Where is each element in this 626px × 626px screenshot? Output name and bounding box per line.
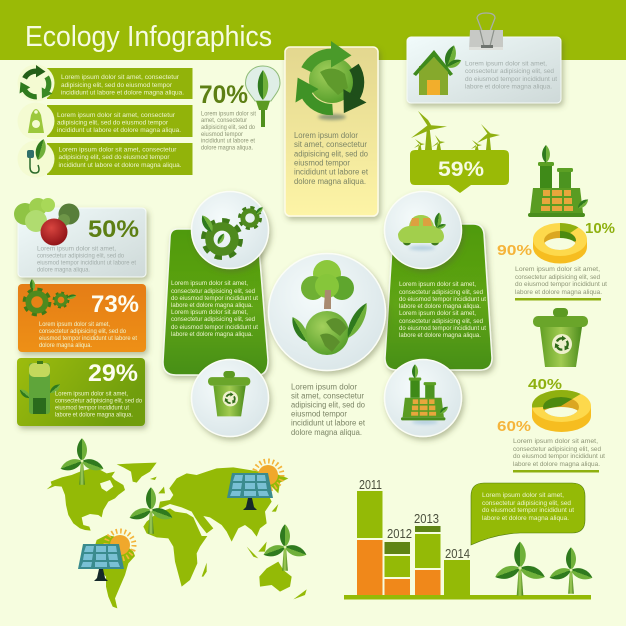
text block: donut 1: do eiusmod tempor incididunt ut: [515, 281, 607, 288]
label 40%: 40%: [528, 376, 562, 393]
text block: incididunt ut labore et: [294, 168, 369, 176]
bar 2012: 2012: [387, 526, 412, 541]
text block: consectetur adipisicing elit, sed do: [55, 398, 142, 404]
bar 2011: 2011: [359, 477, 382, 492]
header band: [0, 0, 626, 60]
text block: consectetur adipisicing elit, sed do: [37, 252, 124, 260]
stat 70%: 70%: [199, 81, 248, 109]
icon: wind turbine, Africa: [128, 487, 174, 534]
panel: three banners: [15, 64, 192, 178]
circle: gears: [192, 192, 268, 268]
text block: eiusmod tempor: [294, 158, 350, 168]
panel: orange gears 73 percent: [18, 279, 146, 352]
speech bubble: Lorem ipsum dolor sit amet,: [482, 492, 564, 499]
speech bubble: labore et dolore magna aliqua.: [482, 515, 569, 522]
banner 1: adipisicing elit, sed do eiusmod tempor: [61, 82, 173, 89]
text block: eiusmod tempor: [201, 131, 243, 138]
text block: dolore magna aliqua.: [294, 177, 366, 186]
text block: consectetur adipisicing elit, sed: [171, 288, 255, 295]
text block: eiusmod tempor incididunt ut labore et: [39, 335, 137, 342]
panel: yellow recycle card: [285, 41, 379, 216]
banner 1: Lorem ipsum dolor sit amet, consectetur: [61, 74, 180, 81]
text block: consectetur adipisicing elit, sed: [465, 68, 554, 75]
icon: solar panel with sun, South America: [78, 531, 134, 581]
speech bubble: [471, 483, 585, 545]
text block: incididunt ut labore et: [201, 138, 255, 144]
speech bubble: do eiusmod tempor incididunt ut: [482, 507, 574, 514]
stat 73%: 73%: [91, 291, 139, 318]
text block: [399, 281, 486, 339]
text block: consectetur adipisicing elit, sed: [171, 316, 255, 323]
text block: do eiusmod tempor incididunt ut: [465, 76, 557, 83]
text block: centre: incididunt ut labore et: [291, 418, 366, 428]
text block: Lorem ipsum dolor sit: [201, 110, 256, 118]
icon: battery: [18, 361, 62, 414]
text block: donut 1: labore et dolore magna aliqua.: [515, 289, 602, 296]
text block: donut 2: Lorem ipsum dolor sit amet,: [513, 438, 598, 445]
panel: 59 percent wind banner: [410, 111, 509, 193]
panel: clipped note with house: [407, 13, 561, 103]
text block: do eiusmod tempor incididunt ut: [399, 325, 486, 332]
text block: sit amet, consectetur: [294, 140, 367, 149]
banner 3: [18, 138, 192, 178]
icon: recycling globe: [285, 41, 379, 124]
circle: factory: [384, 360, 462, 436]
panel: vegetables 50 percent: [14, 198, 146, 277]
chart: donut 10/90: [498, 223, 615, 264]
text block: [39, 321, 137, 349]
title: Ecology Infographics: [25, 21, 272, 53]
text block: eiusmod tempor incididunt ut: [55, 404, 129, 412]
text block: adipisicing elit, sed do: [201, 124, 255, 131]
text block: eiusmod tempor incididunt ut labore et: [37, 260, 136, 266]
icon: globe: [305, 311, 349, 355]
text block: amet, consectetur: [201, 117, 247, 124]
stat 50%: 50%: [88, 216, 139, 243]
text block: labore et dolore magna aliqua.: [399, 332, 481, 339]
icon: solar panel with sun, Asia: [227, 461, 282, 510]
text block: dolore magna aliqua.: [37, 266, 90, 274]
circle: recycling bin: [192, 360, 268, 436]
text block: donut 2: [513, 438, 605, 472]
text block: dolore magna aliqua.: [39, 342, 92, 349]
text block: labore et dolore magna aliqua.: [171, 331, 253, 338]
icon: tree: [301, 260, 354, 309]
text block: dolore magna aliqua.: [201, 144, 253, 152]
text block: labore et dolore magna aliqua.: [399, 303, 481, 310]
text block: [465, 60, 557, 90]
bar 2014: [444, 546, 470, 595]
stat 29%: 29%: [88, 360, 138, 387]
text block: do eiusmod tempor incididunt ut: [171, 295, 258, 302]
text block: donut 1: Lorem ipsum dolor sit amet,: [515, 266, 600, 273]
text block: [55, 390, 142, 418]
icon: small wind turbine: [548, 547, 594, 594]
banner 1: incididunt ut labore et dolore magna aliqua.: [61, 90, 184, 96]
chart: donut 40/60: [498, 379, 591, 432]
bar chart: [344, 477, 591, 600]
banner 3: Lorem ipsum dolor sit amet, consectetur: [58, 146, 177, 154]
text block: consectetur adipisicing elit, sed: [399, 318, 483, 325]
text block: centre: eiusmod tempor: [291, 410, 347, 418]
text block: Lorem ipsum dolor sit amet,: [171, 280, 248, 287]
bar 2013: 2013: [414, 511, 439, 526]
label 90%: 90%: [497, 242, 532, 259]
text block: Lorem ipsum dolor sit amet,: [171, 309, 248, 316]
banner 2: incididunt ut labore et dolore magna aliqua.: [57, 127, 181, 134]
panel: 70 percent with bulb: [199, 66, 280, 152]
circle: car: [384, 192, 462, 268]
text block: centre: dolore magna aliqua.: [291, 428, 362, 437]
text block: Lorem ipsum dolor sit amet,: [39, 321, 110, 328]
icon: recycling bin: [533, 308, 588, 367]
bar 2012: [384, 526, 412, 595]
icon: light bulb with leaf: [246, 66, 280, 127]
label 10%: 10%: [585, 220, 615, 237]
icon: leaves: [288, 300, 372, 344]
text block: Lorem ipsum dolor sit amet,: [399, 310, 476, 317]
text block: donut 2: consectetur adipisicing elit, sed: [513, 446, 602, 453]
text block: donut 2: labore et dolore magna aliqua.: [513, 461, 600, 468]
text block: Lorem ipsum dolor sit amet,: [55, 390, 128, 398]
label 60%: 60%: [497, 418, 531, 435]
text block: Lorem ipsum dolor sit amet,: [37, 246, 116, 252]
bar 2013: [414, 511, 440, 595]
text block: [171, 280, 258, 338]
text block: Lorem ipsum dolor sit amet,: [465, 60, 547, 68]
banner 1: [15, 64, 192, 103]
text block: consectetur adipisicing elit, sed: [399, 289, 483, 296]
text block: consectetur adipisicing elit, sed do: [39, 328, 126, 335]
icon: wind turbine silhouettes: [411, 111, 500, 150]
panel: battery 29 percent: [17, 358, 145, 426]
banner 3: incididunt ut labore et dolore magna aliqua.: [58, 162, 182, 169]
icon: gears: [25, 279, 77, 314]
icon: factory: [528, 145, 590, 217]
text block: [201, 110, 256, 152]
bar 2014: 2014: [445, 546, 470, 561]
panel: right green tab: [385, 224, 492, 370]
text block: centre: Lorem ipsum dolor: [291, 382, 357, 392]
icon: binder clip: [469, 13, 503, 50]
text block: adipisicing elit, sed do: [294, 150, 369, 158]
text block: do eiusmod tempor incididunt ut: [399, 296, 486, 303]
text block: donut 2: do eiusmod tempor incididunt ut: [513, 453, 605, 460]
bar 2011: [357, 477, 382, 595]
text block: do eiusmod tempor incididunt ut: [171, 324, 258, 331]
banner 2: adipisicing elit, sed do eiusmod tempor: [57, 120, 169, 126]
text block: Lorem ipsum dolor sit amet,: [399, 281, 476, 288]
icon: house: [413, 44, 463, 95]
banner 2: Lorem ipsum dolor sit amet, consectetur: [57, 112, 176, 119]
text block: centre: [291, 382, 366, 437]
text block: [294, 131, 369, 186]
text block: centre: sit amet, consectetur: [291, 392, 364, 400]
banner 2: [18, 102, 192, 140]
icon: wind turbine, North America: [59, 438, 105, 485]
panel: left green tab: [163, 229, 268, 375]
circle: tree on globe: [268, 254, 386, 370]
text block: labore et dolore magna aliqua.: [55, 412, 133, 418]
text block: labore et dolore magna aliqua.: [171, 302, 253, 309]
banner 3: adipisicing elit, sed do eiusmod tempor: [58, 154, 170, 161]
speech bubble: consectetur adipisicing elit, sed: [482, 500, 571, 507]
icon: large wind turbine: [493, 542, 547, 596]
icon: vegetables: [14, 198, 80, 246]
text block: centre: adipisicing elit, sed do: [291, 400, 366, 410]
text block: [37, 246, 136, 274]
text block: Lorem ipsum dolor: [294, 131, 358, 140]
stat 59%: 59%: [438, 158, 484, 181]
text block: labore et dolore magna aliqua.: [465, 84, 552, 90]
text block: donut 1: [515, 266, 607, 300]
world map: [47, 438, 307, 608]
text block: donut 1: consectetur adipisicing elit, sed: [515, 274, 601, 281]
icon: wind turbine, Australia: [262, 524, 308, 571]
